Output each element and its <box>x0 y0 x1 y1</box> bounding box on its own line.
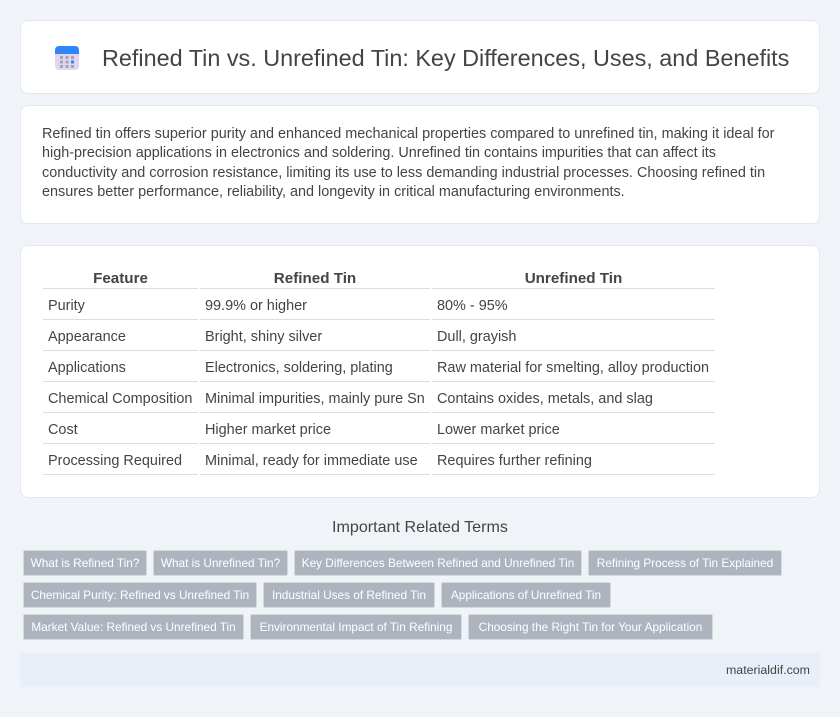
comparison table: Minimal impurities, mainly pure Sn <box>205 391 425 407</box>
related terms tags: What is Unrefined Tin? <box>161 556 280 570</box>
intro paragraph: ensures better performance, reliability, and longevity in critical manufacturing environments. <box>42 184 625 200</box>
comparison table: Purity <box>48 298 85 314</box>
icon: calendar <box>55 46 79 70</box>
comparison table: Bright, shiny silver <box>205 329 322 345</box>
comparison table: 99.9% or higher <box>205 298 307 314</box>
related terms tags: Refining Process of Tin Explained <box>597 556 773 570</box>
panel: header <box>20 20 820 94</box>
comparison table: Processing Required <box>48 453 182 469</box>
comparison table: Appearance <box>48 329 126 345</box>
related terms tags <box>23 550 782 640</box>
title: Refined Tin vs. Unrefined Tin: Key Differences, Uses, and Benefits <box>102 45 789 71</box>
comparison table: Dull, grayish <box>437 329 516 345</box>
comparison table: Refined Tin <box>274 270 356 287</box>
related terms tags: What is Refined Tin? <box>31 556 139 570</box>
footer bar <box>20 653 820 687</box>
intro paragraph: high-precision applications in electronics and soldering. Unrefined tin contains impurities that can affect its <box>42 145 716 161</box>
related terms tags: Environmental Impact of Tin Refining <box>260 620 452 634</box>
comparison table <box>43 270 715 475</box>
comparison table: Feature <box>93 270 148 287</box>
comparison table: 80% - 95% <box>437 298 508 314</box>
intro paragraph: Refined tin offers superior purity and enhanced mechanical properties compared to unrefined tin, making it ideal for <box>42 126 774 142</box>
footer credit: materialdif.com <box>726 663 810 677</box>
comparison table: Contains oxides, metals, and slag <box>437 391 653 407</box>
comparison table: Requires further refining <box>437 453 592 469</box>
intro paragraph: conductivity and corrosion resistance, limiting its use to less demanding industrial processes. Choosing refined tin <box>42 165 765 181</box>
intro paragraph <box>42 126 774 200</box>
comparison table: Chemical Composition <box>48 391 192 407</box>
related terms tags: Chemical Purity: Refined vs Unrefined Tin <box>31 588 249 602</box>
comparison table: Minimal, ready for immediate use <box>205 453 418 469</box>
comparison table: Higher market price <box>205 422 331 438</box>
related terms tags: Applications of Unrefined Tin <box>451 588 601 602</box>
panel: intro text <box>20 105 820 224</box>
related terms tags: Key Differences Between Refined and Unrefined Tin <box>302 556 574 570</box>
heading: related terms: Important Related Terms <box>332 518 508 536</box>
comparison table: Lower market price <box>437 422 560 438</box>
comparison table: Cost <box>48 422 78 438</box>
comparison table: Raw material for smelting, alloy production <box>437 360 709 376</box>
panel: comparison table <box>20 245 820 498</box>
comparison table: Electronics, soldering, plating <box>205 360 393 376</box>
related terms tags: Market Value: Refined vs Unrefined Tin <box>31 620 236 634</box>
comparison table: Unrefined Tin <box>525 270 622 287</box>
comparison table: Applications <box>48 360 126 376</box>
related terms tags: Choosing the Right Tin for Your Application <box>479 620 702 634</box>
related terms tags: Industrial Uses of Refined Tin <box>272 588 426 602</box>
